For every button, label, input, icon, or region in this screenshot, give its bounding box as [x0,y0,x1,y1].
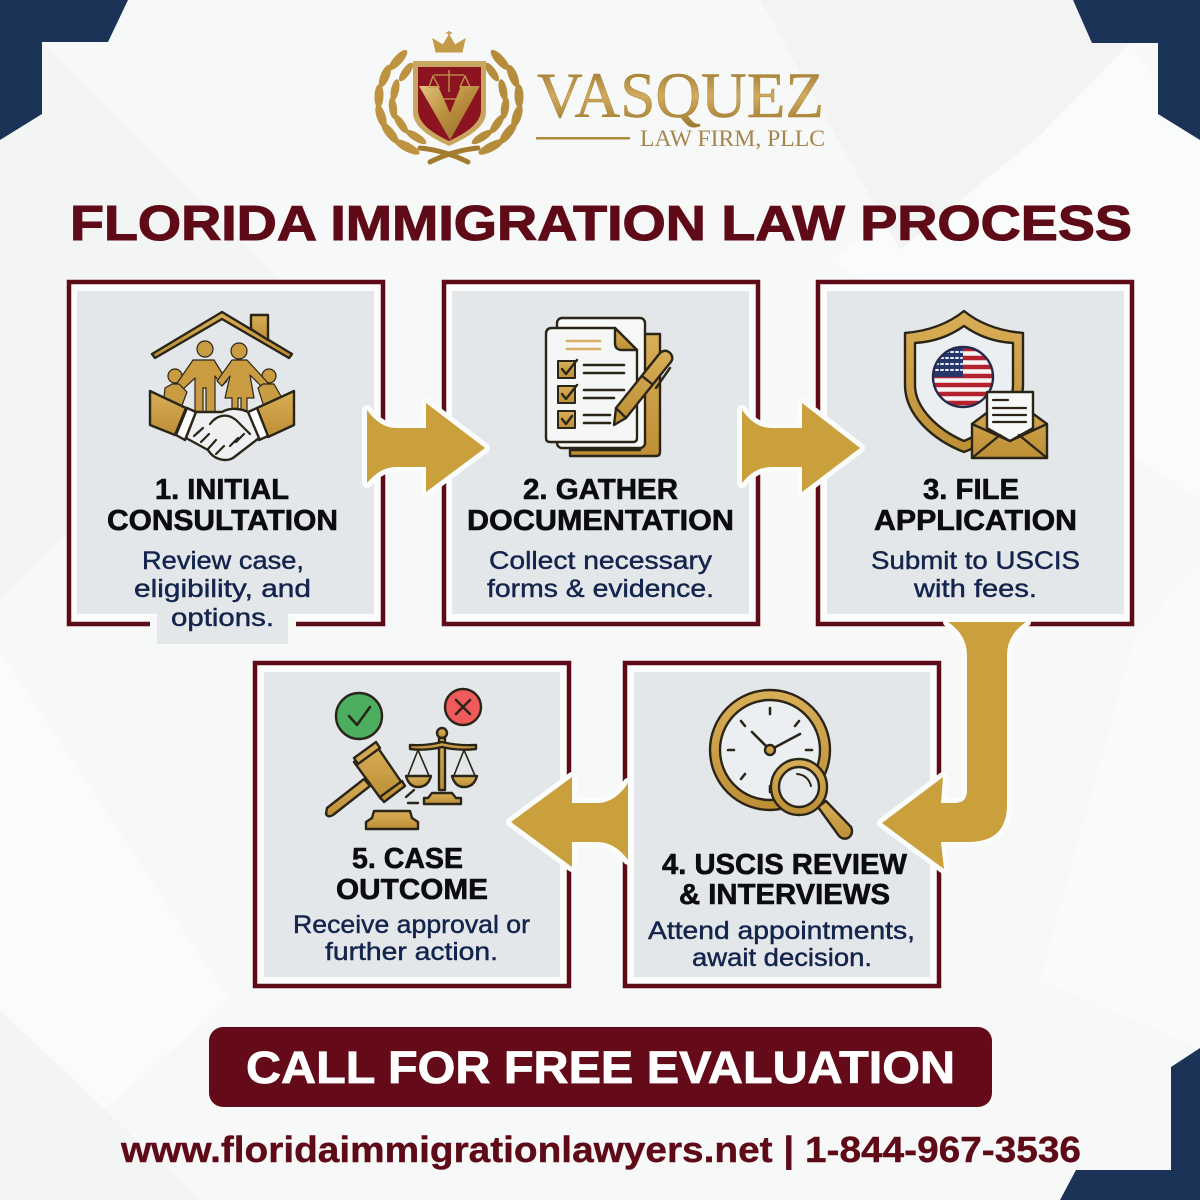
corner accent: top right [1073,0,1200,140]
description: Collect necessary [489,547,713,575]
panel: step 5 [255,663,569,986]
description: eligibility, and [134,575,311,603]
corner accent: top left [0,0,128,140]
wordmark: VASQUEZ [537,60,824,132]
description: with fees. [913,575,1037,603]
panel: step 4 [625,663,939,986]
heading line 2: & INTERVIEWS [679,879,890,911]
description: options. [171,604,274,632]
call to action button: CALL FOR FREE EVALUATION [246,1042,955,1093]
icon: gavel and scales [326,689,481,829]
description: Review case, [142,547,304,575]
tagline: LAW FIRM, PLLC [640,126,825,151]
panel: step 1 [69,282,383,644]
panel: step 3 [818,282,1132,624]
logo [373,31,825,162]
heading line 2: APPLICATION [874,505,1077,537]
heading: 3. FILE [923,474,1019,506]
contact line: www.floridaimmigrationlawyers.net | 1-844-967-3536 [120,1129,1081,1171]
icon: shield [413,61,486,146]
description [487,547,714,603]
arrow: step 3 to step 4 [882,622,1026,869]
icon: ribbon cross [420,148,478,162]
description: Receive approval or [293,911,530,939]
icon: checklist and pen [546,318,672,456]
icon: flag [933,347,993,407]
description: Submit to USCIS [871,547,1080,575]
icon: crown [433,31,465,52]
description [871,547,1080,603]
heading: 1. INITIAL [155,474,289,506]
description [648,917,915,972]
description: Attend appointments, [648,917,915,945]
icon: house, family and handshake [150,312,294,460]
description [134,547,311,632]
title: FLORIDA IMMIGRATION LAW PROCESS [70,197,1132,251]
heading line 2: CONSULTATION [107,505,338,537]
description: further action. [325,938,498,966]
heading line 2: OUTCOME [336,874,488,906]
description: await decision. [692,944,872,972]
corner accent: bottom right [1060,1048,1200,1200]
heading: 5. CASE [352,843,463,875]
heading: 2. GATHER [523,474,678,506]
heading: 4. USCIS REVIEW [662,849,907,881]
arrow: step 2 to step 3 [742,403,860,492]
call to action button [209,1027,992,1107]
rule [536,137,630,140]
icon: shield, flag and envelope [905,311,1047,458]
arrow: step 1 to step 2 [367,403,485,492]
heading line 2: DOCUMENTATION [467,505,734,537]
panel: step 2 [444,282,758,624]
icon: clock and magnifier [710,690,852,839]
description [293,911,530,966]
description: forms & evidence. [487,575,714,603]
icon: wreath right [470,47,525,158]
icon: wreath left [373,47,428,158]
arrow: step 4 to step 5 [511,777,628,867]
